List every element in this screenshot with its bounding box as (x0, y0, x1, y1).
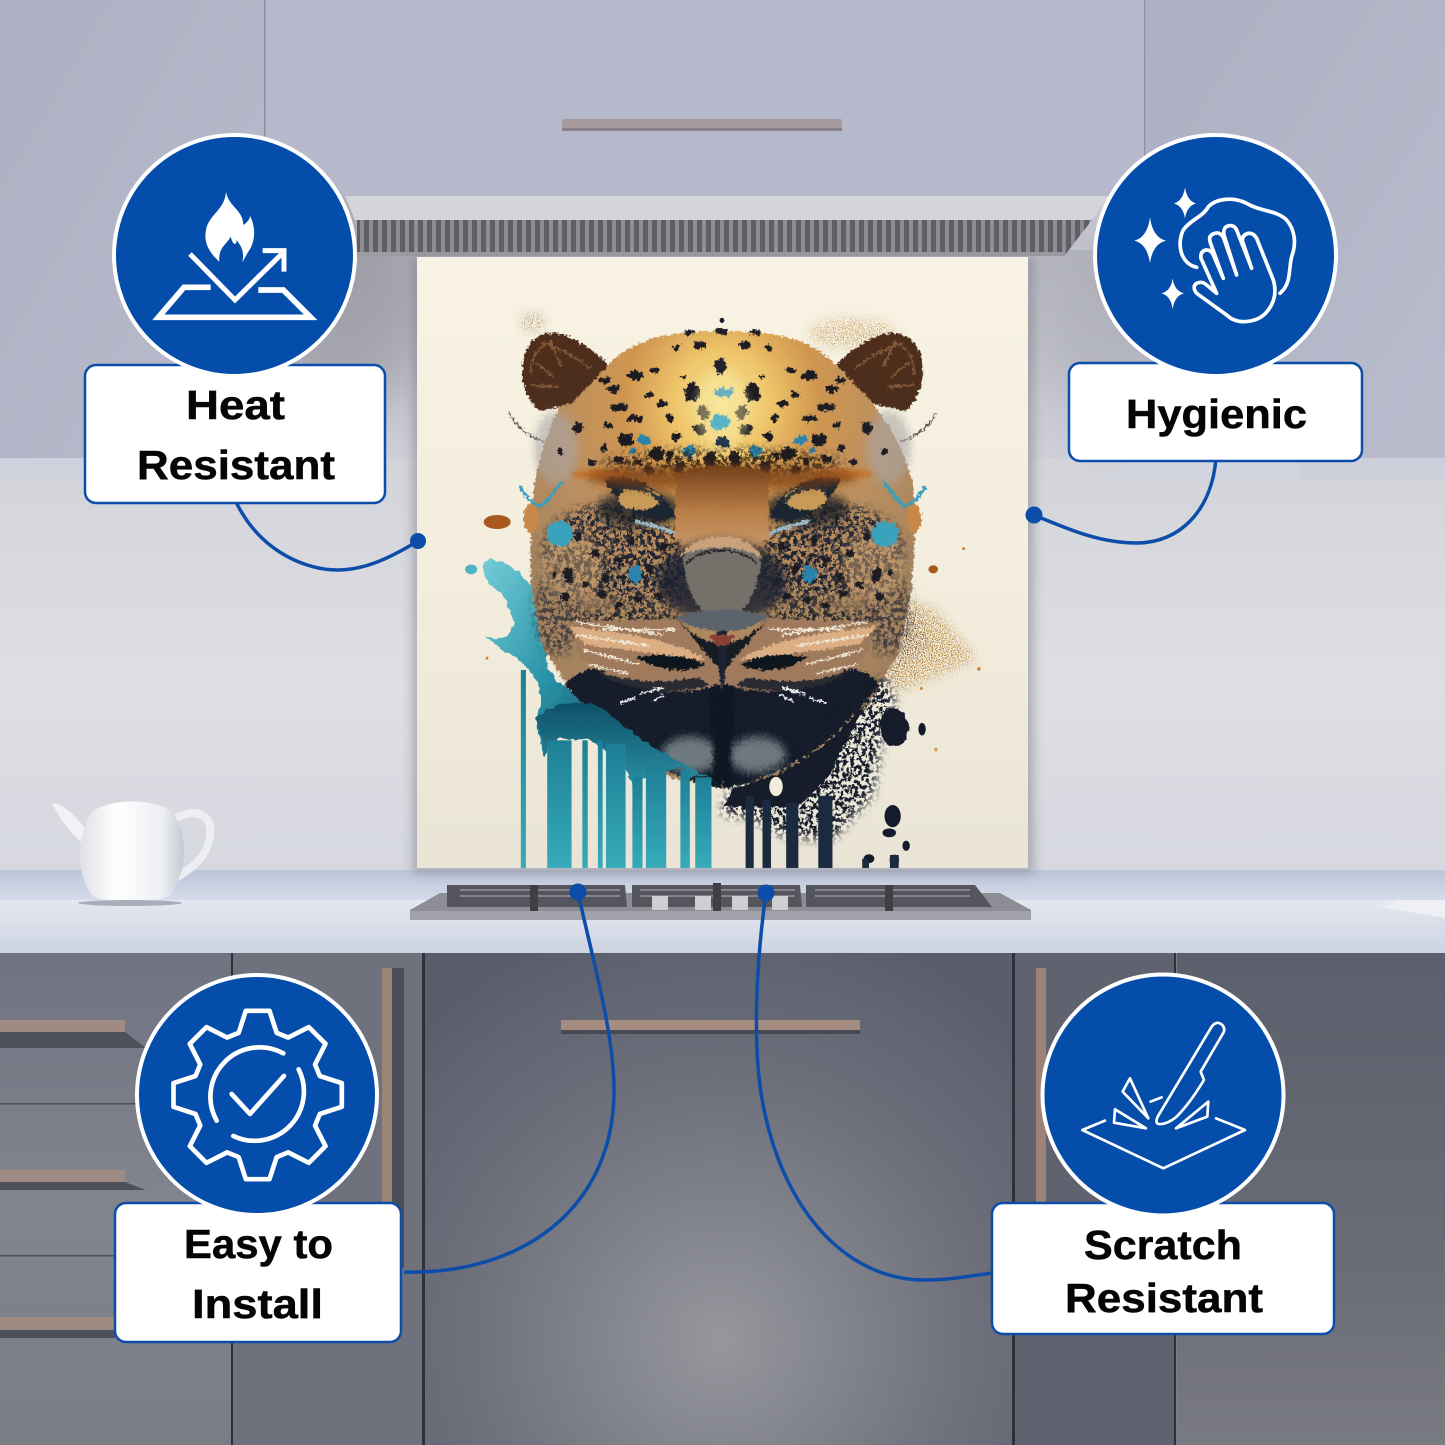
ink splatter (720, 318, 926, 866)
label text line 2: Install (192, 1281, 323, 1327)
label box (1069, 363, 1362, 461)
cabinet handle top (562, 119, 842, 131)
label text line 2: Resistant (1065, 1275, 1263, 1321)
connector: scratch resistant (756, 884, 992, 1280)
label box (992, 1203, 1334, 1334)
extractor hood (345, 196, 1110, 256)
icon: flame and reflected arrow (158, 192, 311, 317)
connector: easy to install (404, 884, 614, 1272)
gas hob (410, 883, 1031, 920)
ink drips (746, 796, 899, 868)
icon: gear with check (173, 1011, 342, 1179)
label text: Easy to (184, 1221, 333, 1267)
upper cabinets (0, 0, 1445, 480)
callout: scratch resistant (992, 974, 1334, 1334)
icon: hand wiping with sparkles (1134, 187, 1294, 322)
teal splash (483, 560, 629, 770)
chin fur (661, 737, 719, 774)
teal wash under jaw (536, 702, 720, 785)
label box (115, 1203, 401, 1342)
paint dust (521, 313, 977, 692)
badge circle (114, 135, 355, 376)
paint droplets (465, 515, 981, 751)
label text line 2: Resistant (137, 442, 335, 488)
connector: hygienic (1026, 458, 1216, 543)
leopard head (509, 328, 936, 788)
label text: Heat (186, 382, 285, 428)
badge circle (1095, 135, 1336, 376)
lower cabinets (0, 953, 1445, 1445)
callout: easy to install (115, 975, 401, 1342)
label text: Hygienic (1126, 391, 1307, 437)
label box (85, 365, 385, 503)
icon: knife scratching surface (1082, 1023, 1245, 1168)
glass splashback panel (412, 257, 1034, 874)
badge circle (1042, 974, 1284, 1216)
callout: heat resistant (85, 135, 385, 503)
central forehead spots (711, 328, 734, 448)
teal drips (521, 670, 711, 868)
jaguar artwork (465, 313, 981, 868)
connector: heat resistant (236, 502, 426, 570)
nose (658, 540, 786, 622)
badge circle (137, 975, 377, 1215)
teapot (52, 802, 210, 906)
tiled wall (0, 250, 1445, 875)
label text: Scratch (1084, 1222, 1242, 1268)
callout: hygienic (1069, 135, 1362, 461)
countertop (0, 870, 1445, 953)
